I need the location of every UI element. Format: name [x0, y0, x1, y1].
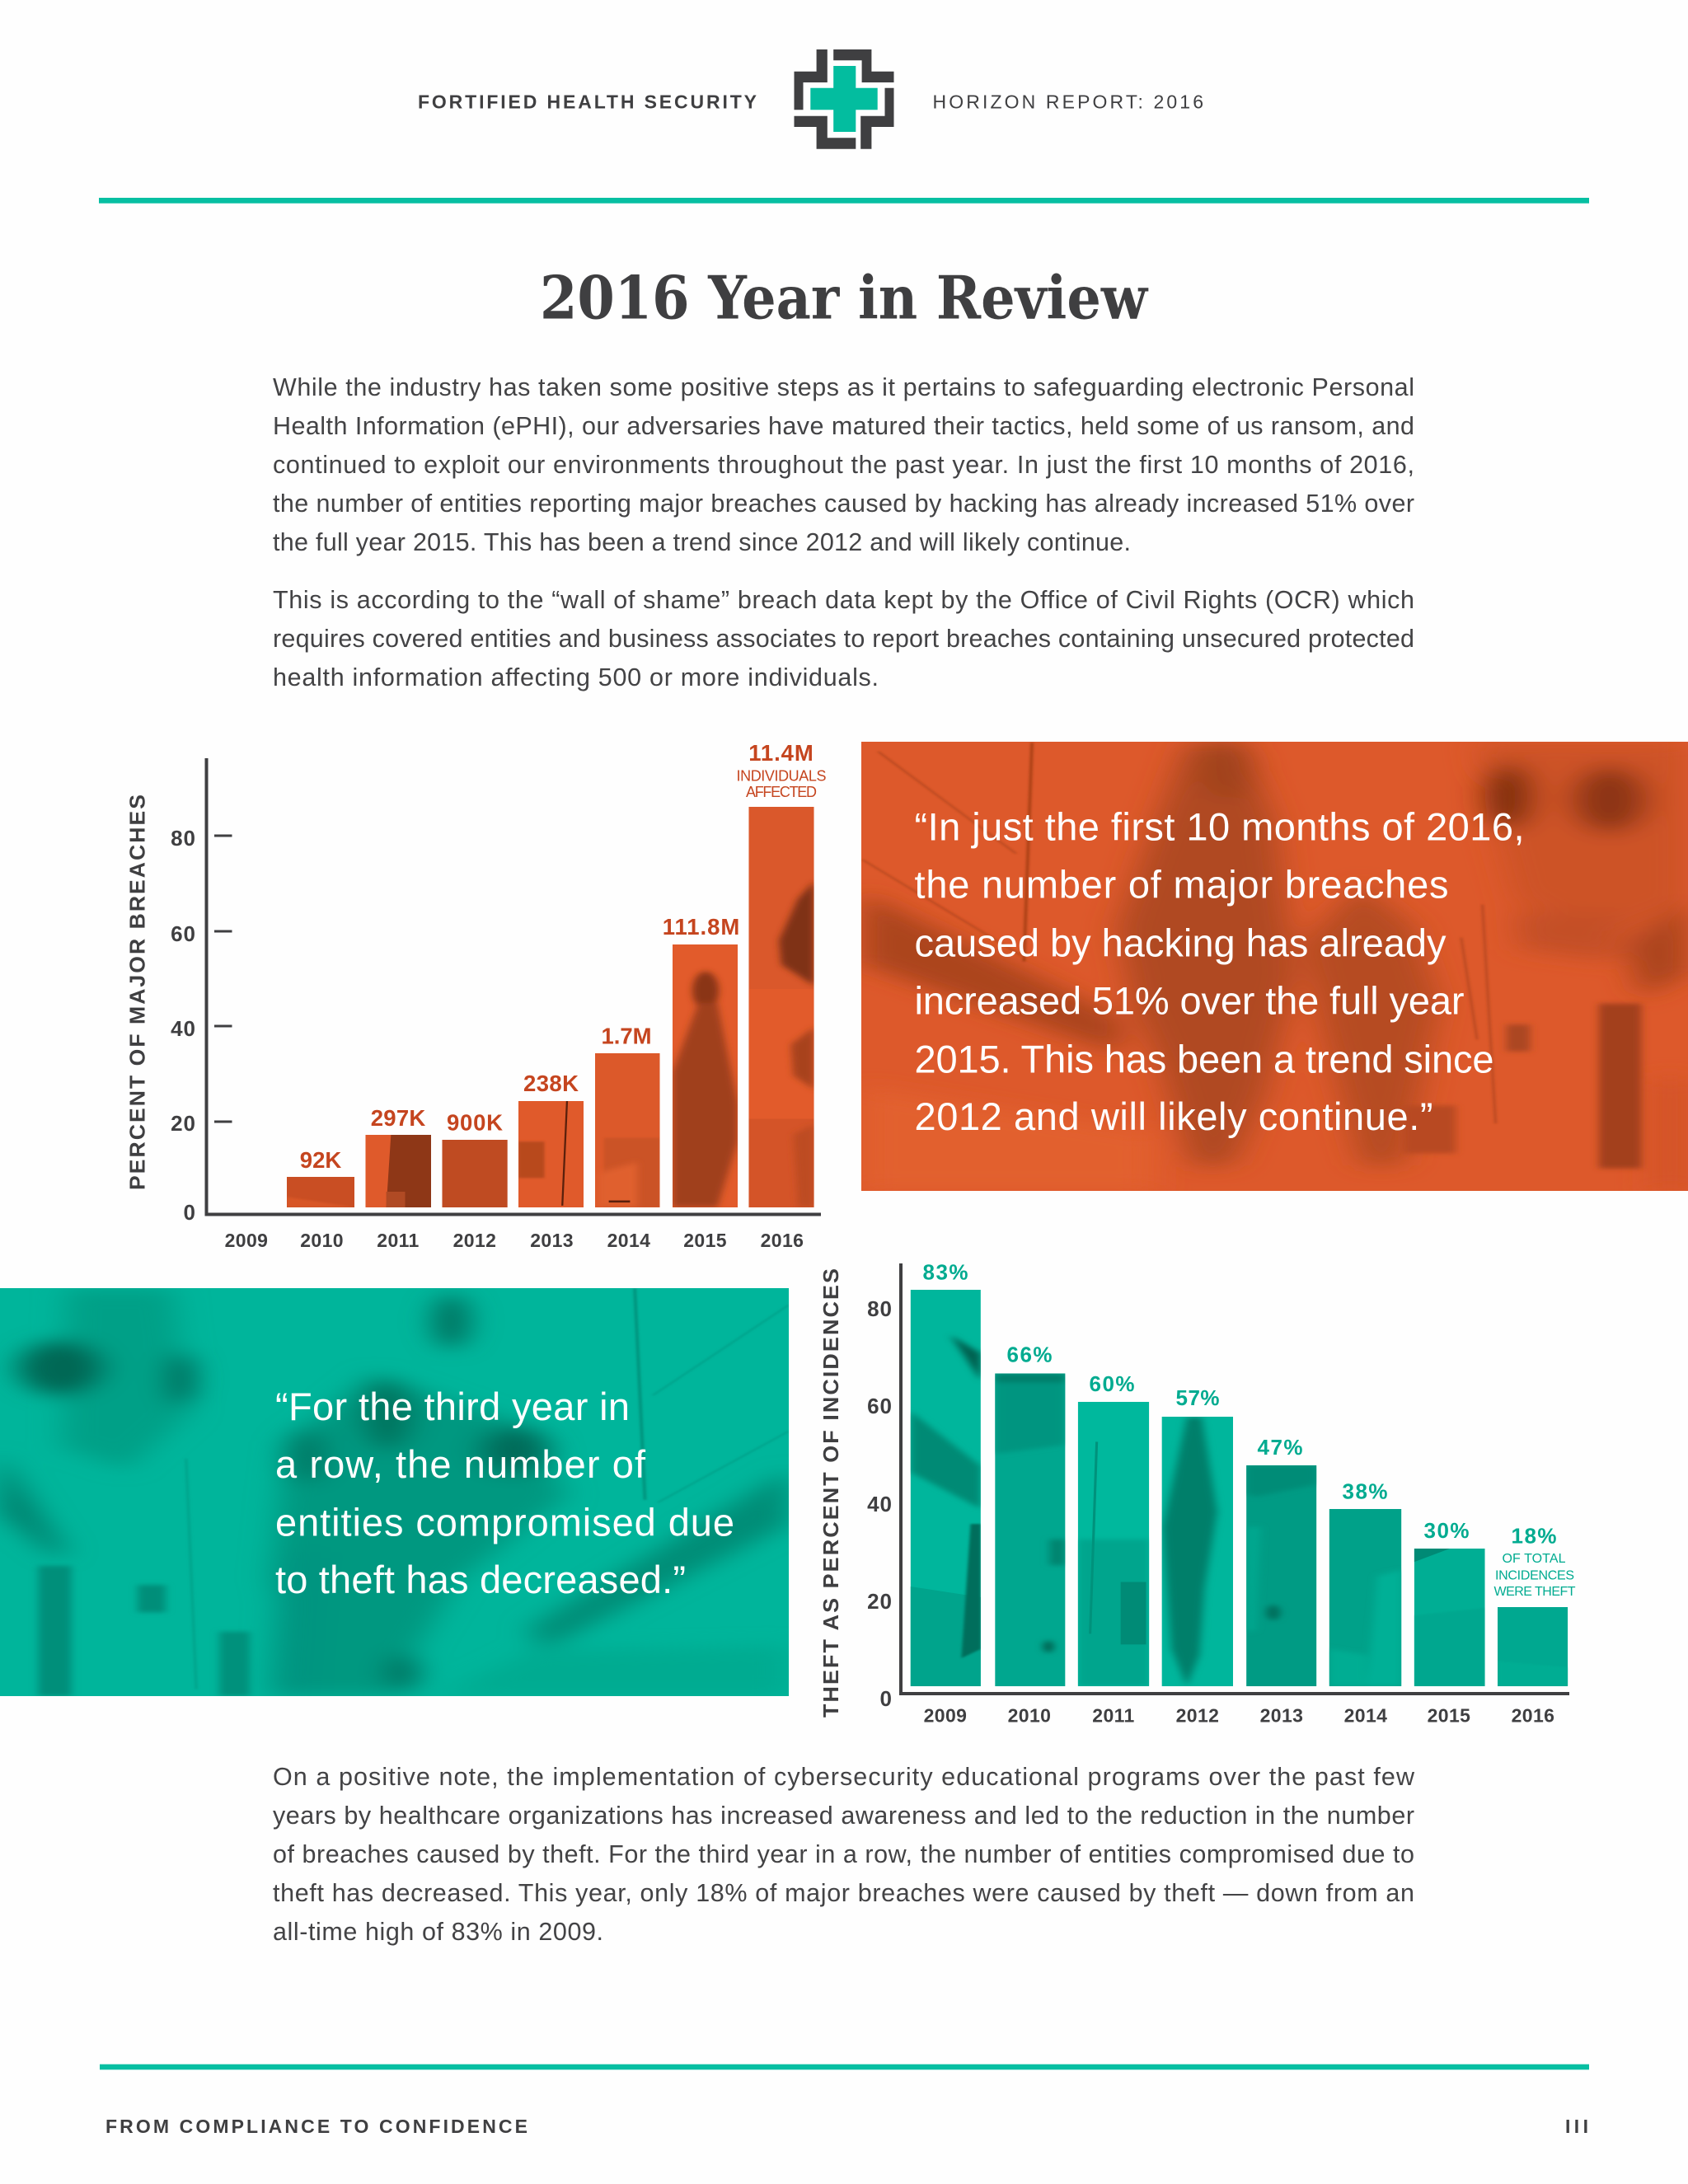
year labels	[225, 1230, 804, 1251]
intro text: health information affecting 500 or more individuals.	[273, 663, 879, 691]
quote text	[275, 1385, 734, 1601]
value labels: 18%	[1512, 1523, 1556, 1548]
value labels: 900K	[447, 1109, 503, 1136]
value labels: 30%	[1424, 1518, 1469, 1543]
year labels: 2012	[1176, 1704, 1219, 1726]
intro text: continued to exploit our environments throughout the past year. In just the first 10 months of 2016,	[273, 451, 1414, 479]
closing text: years by healthcare organizations has increased awareness and led to the reduction in the number	[273, 1802, 1414, 1830]
intro text: Health Information (ePHI), our adversaries have matured their tactics, held some of us ransom, and	[273, 412, 1414, 440]
year labels: 2014	[1344, 1704, 1387, 1726]
value labels: WERE THEFT	[1493, 1585, 1576, 1599]
y labels: 0	[880, 1686, 893, 1711]
y labels	[867, 1296, 893, 1711]
closing text: On a positive note, the implementation of cybersecurity educational programs over the past few	[273, 1763, 1415, 1791]
bars	[911, 1290, 1568, 1686]
closing text	[273, 1763, 1415, 1946]
quote text	[915, 804, 1525, 1138]
closing text: theft has decreased. This year, only 18% of major breaches were caused by theft — down from an	[273, 1879, 1414, 1907]
y labels: 20	[171, 1111, 196, 1136]
value labels: AFFECTED	[746, 784, 817, 800]
y labels: 40	[867, 1492, 893, 1516]
value labels: 60%	[1090, 1371, 1134, 1396]
year labels	[924, 1704, 1554, 1726]
footer	[106, 2116, 1588, 2137]
axis title: THEFT AS PERCENT OF INCIDENCES	[818, 1267, 843, 1718]
intro text: requires covered entities and business associates to report breaches containing unsecured protected	[273, 625, 1414, 653]
icon: cross logo	[795, 49, 893, 149]
closing text: of breaches caused by theft. For the third year in a row, the number of entities compromised due to	[273, 1840, 1414, 1868]
quote text: entities compromised due	[275, 1500, 734, 1544]
brand name: FORTIFIED HEALTH SECURITY	[418, 91, 757, 112]
value labels: INCIDENCES	[1495, 1569, 1574, 1582]
y labels	[171, 826, 196, 1225]
year labels: 2011	[1092, 1704, 1135, 1726]
value labels: 83%	[923, 1259, 968, 1284]
footer rule	[100, 2064, 1589, 2069]
title: 2016 Year in Review	[540, 262, 1149, 333]
year labels: 2015	[683, 1230, 727, 1251]
photo background	[0, 1288, 789, 1696]
value labels: 1.7M	[602, 1024, 651, 1048]
quote text: 2015. This has been a trend since	[915, 1037, 1493, 1081]
tick marks	[214, 836, 232, 1122]
report name: HORIZON REPORT: 2016	[933, 91, 1203, 112]
y labels: 0	[184, 1200, 196, 1225]
value labels: INDIVIDUALS	[737, 768, 826, 785]
intro text: While the industry has taken some positive steps as it pertains to safeguarding electronic Personal	[273, 373, 1414, 401]
year labels: 2014	[607, 1230, 650, 1251]
quote text: caused by hacking has already	[915, 921, 1447, 964]
value labels: 238K	[523, 1071, 579, 1096]
year labels: 2013	[1260, 1704, 1303, 1726]
intro text	[273, 373, 1414, 691]
value labels: 47%	[1258, 1435, 1302, 1460]
value labels	[923, 1259, 1576, 1599]
y labels: 60	[867, 1394, 893, 1418]
y labels: 80	[867, 1296, 893, 1321]
year labels: 2013	[530, 1230, 574, 1251]
y labels: 60	[171, 921, 196, 946]
quote text: the number of major breaches	[915, 862, 1449, 907]
value labels: 92K	[300, 1147, 341, 1173]
year labels: 2009	[225, 1230, 268, 1251]
axis title: PERCENT OF MAJOR BREACHES	[125, 793, 150, 1190]
axes	[901, 1263, 1569, 1694]
y labels: 20	[867, 1589, 893, 1614]
value labels: 38%	[1342, 1479, 1388, 1503]
header	[418, 49, 1203, 149]
intro text: the number of entities reporting major breaches caused by hacking has already increased 51% over	[273, 490, 1414, 518]
bar chart: theft incidences	[818, 1259, 1576, 1726]
value labels: 297K	[371, 1105, 425, 1131]
axes	[206, 758, 821, 1215]
y labels: 40	[171, 1016, 196, 1041]
y labels: 80	[171, 826, 196, 851]
year labels: 2016	[1512, 1704, 1554, 1726]
value labels	[300, 740, 826, 1173]
quote text: to theft has decreased.”	[275, 1558, 686, 1601]
top rule	[99, 198, 1589, 204]
quote text: increased 51% over the full year	[915, 979, 1464, 1022]
quote text: “For the third year in	[275, 1385, 630, 1428]
intro text: This is according to the “wall of shame” breach data kept by the Office of Civil Rights (OCR) which	[273, 586, 1414, 614]
quote text: a row, the number of	[275, 1442, 646, 1486]
value labels: 111.8M	[663, 914, 739, 940]
year labels: 2011	[377, 1230, 420, 1251]
panel: orange quote	[861, 739, 1688, 1191]
footer: FROM COMPLIANCE TO CONFIDENCE	[106, 2116, 528, 2137]
value labels: 11.4M	[748, 740, 814, 766]
year labels: 2010	[1008, 1704, 1051, 1726]
panel: teal quote	[0, 1288, 789, 1696]
year labels: 2012	[453, 1230, 496, 1251]
bar chart: major breaches	[125, 740, 826, 1251]
value labels: 57%	[1175, 1385, 1220, 1410]
bars	[287, 807, 814, 1207]
year labels: 2010	[300, 1230, 344, 1251]
intro text: the full year 2015. This has been a trend since 2012 and will likely continue.	[273, 528, 1131, 556]
photo background	[861, 742, 1688, 1191]
value labels: 66%	[1007, 1342, 1052, 1366]
closing text: all-time high of 83% in 2009.	[273, 1918, 603, 1946]
year labels: 2016	[761, 1230, 804, 1251]
footer: III	[1565, 2116, 1588, 2137]
quote text: 2012 and will likely continue.”	[915, 1094, 1432, 1138]
quote text: “In just the first 10 months of 2016,	[915, 804, 1525, 849]
value labels: OF TOTAL	[1502, 1552, 1566, 1566]
year labels: 2009	[924, 1704, 967, 1726]
year labels: 2015	[1428, 1704, 1470, 1726]
